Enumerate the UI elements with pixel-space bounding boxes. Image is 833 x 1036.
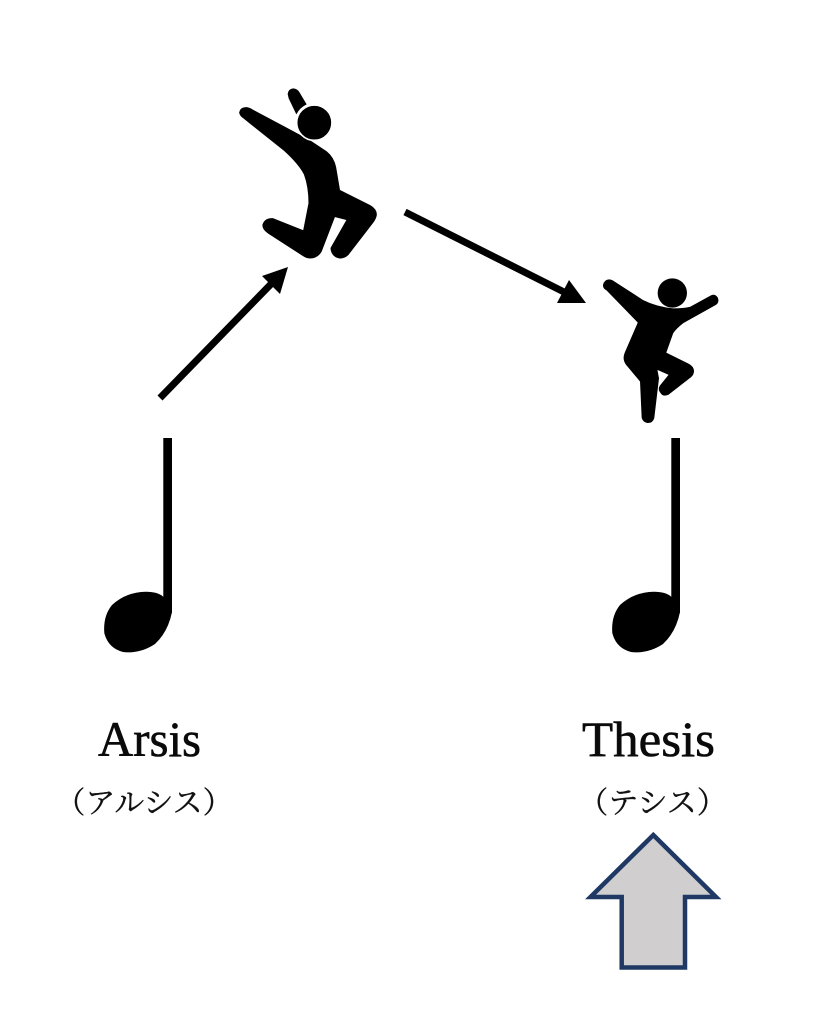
label: Arsis: Arsis: [98, 711, 201, 767]
label: Thesis katakana: （テシス）: [578, 787, 727, 820]
icon: quarter note, thesis: [612, 438, 680, 652]
arrow: up arrow marking thesis: [590, 835, 716, 968]
icon: quarter note, arsis: [104, 438, 172, 652]
icon: landing figure: [604, 278, 717, 422]
arrow: falling to the landing: [405, 212, 586, 303]
icon: leaping figure: [241, 88, 375, 257]
label: Thesis: Thesis: [582, 711, 715, 767]
arrow: rising to the leap: [160, 267, 288, 398]
label: Arsis katakana: （アルシス）: [55, 787, 233, 820]
